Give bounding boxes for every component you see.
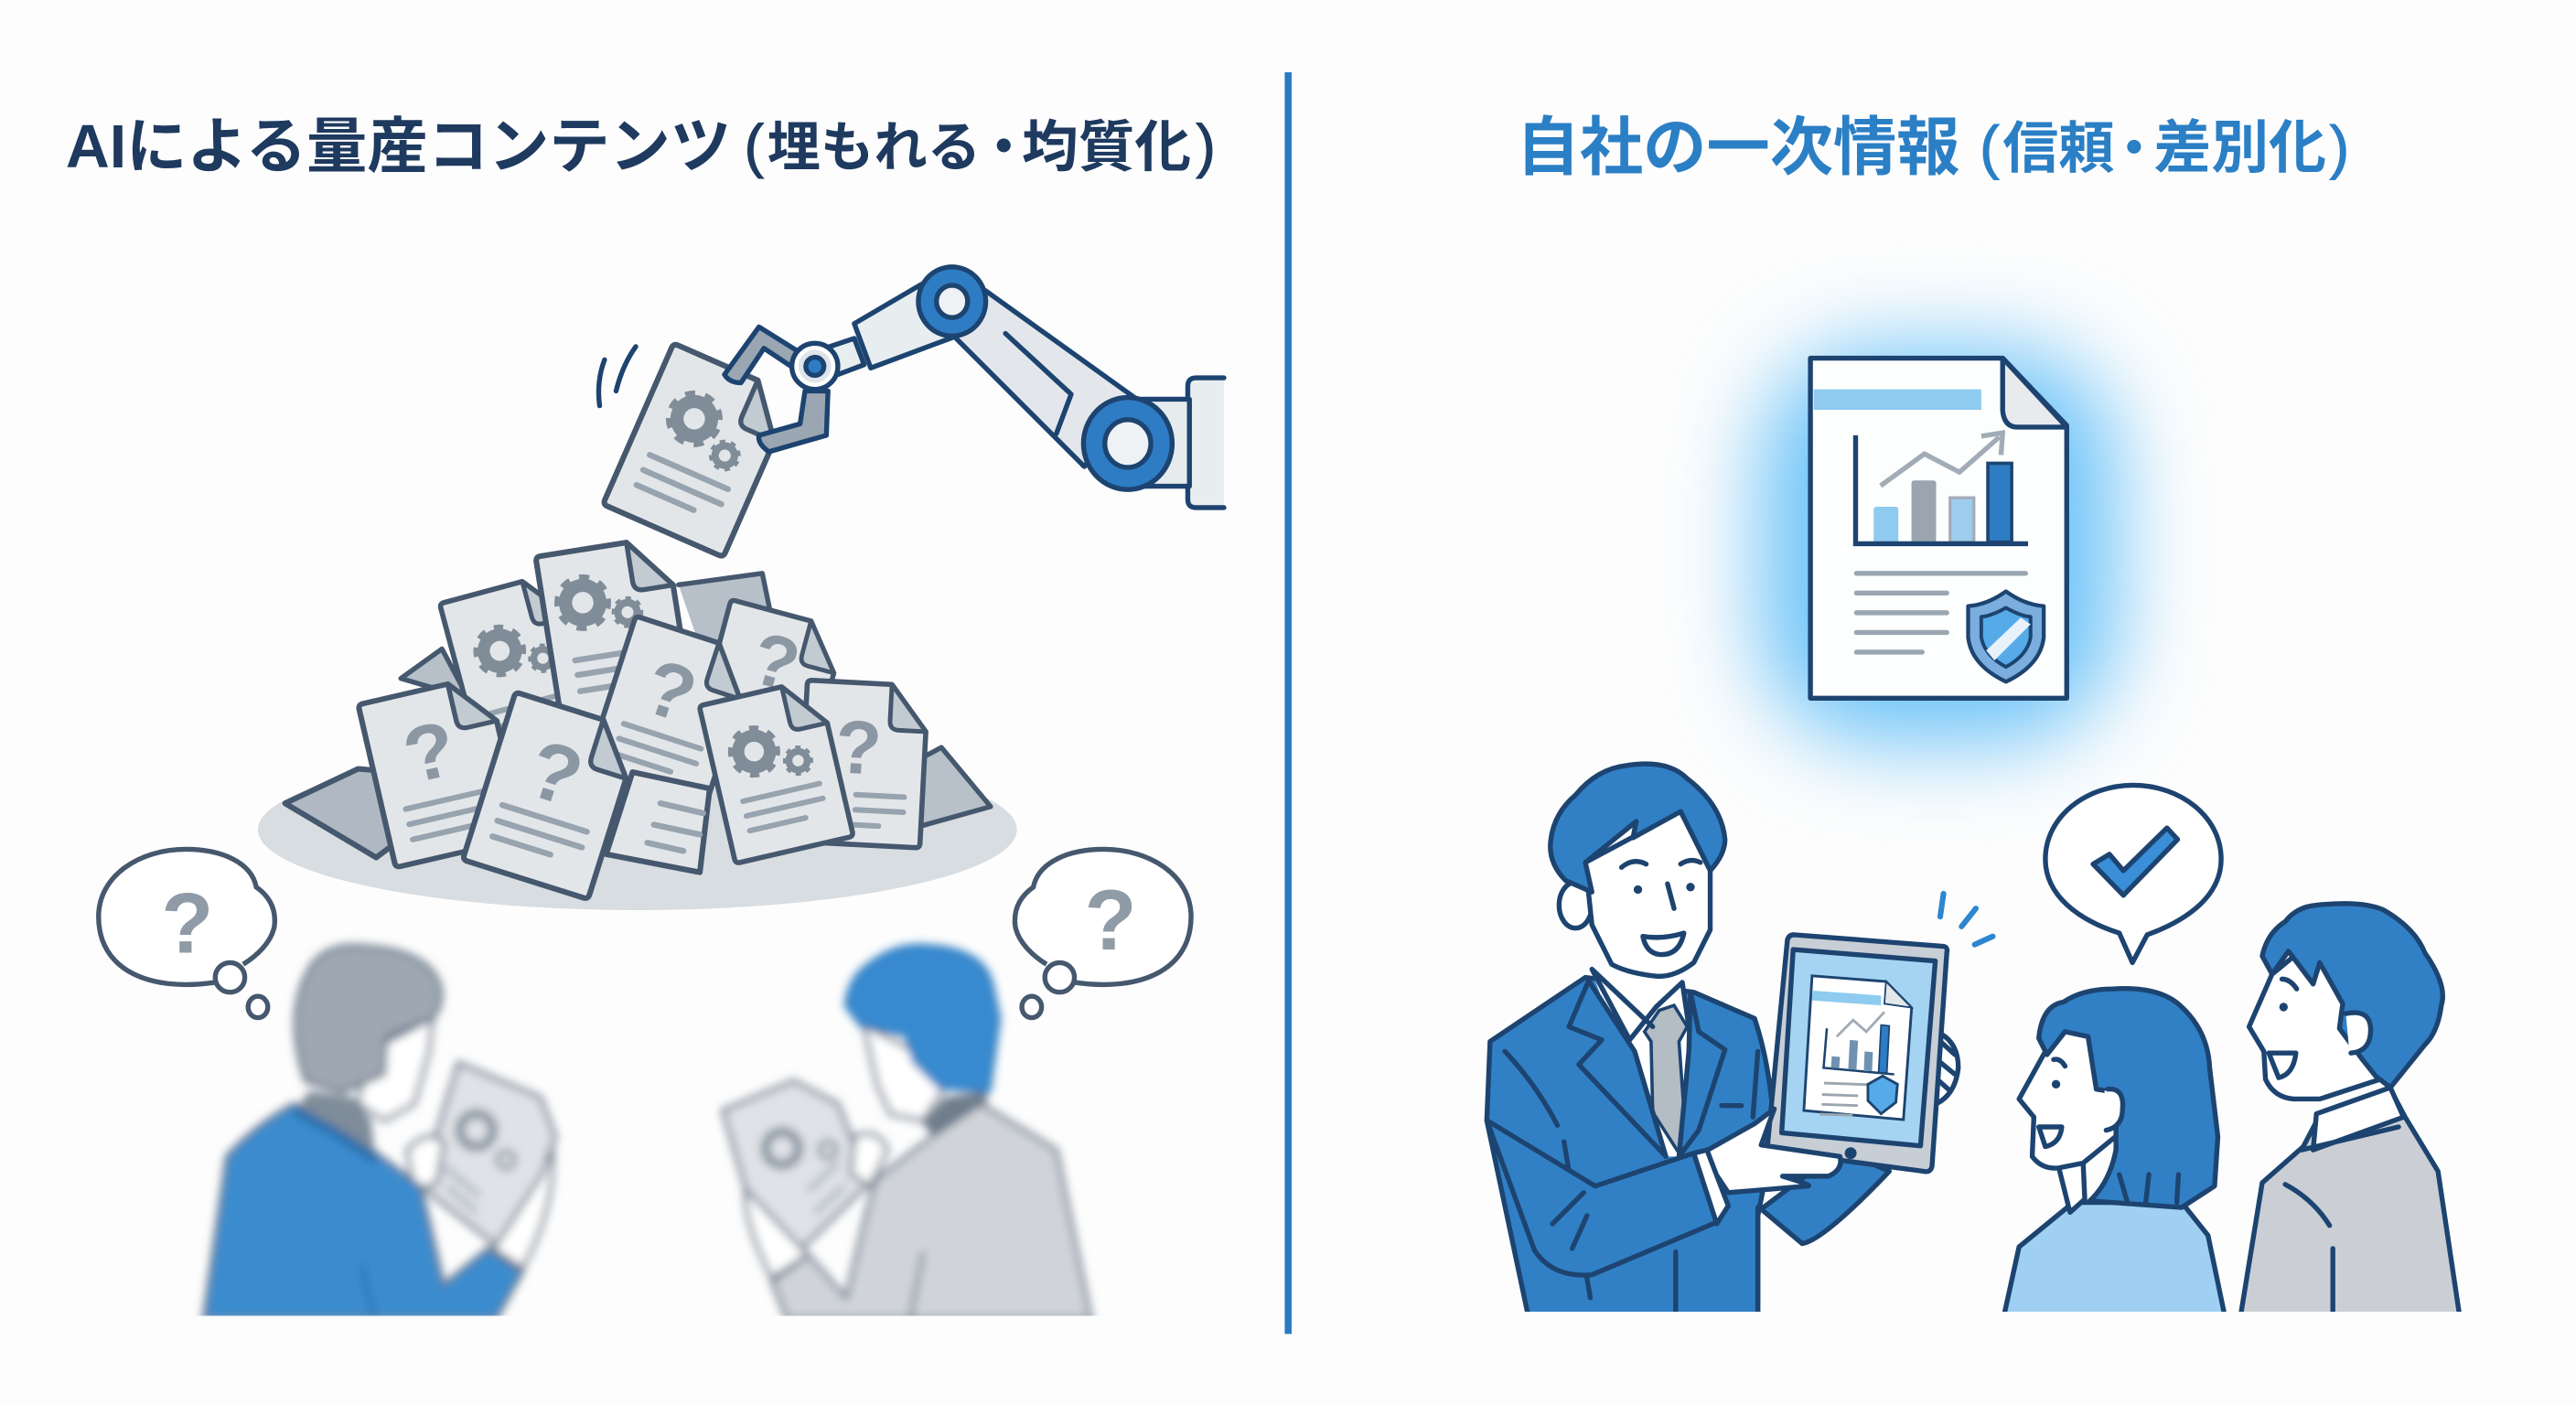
presenter — [1487, 764, 1959, 1314]
panel: first-party information — [1487, 349, 2459, 1314]
header bar — [1814, 390, 1981, 410]
speech bubble with check mark — [2045, 785, 2221, 962]
title: first-party information: ) — [2330, 113, 2349, 180]
title: first-party information: ・ — [2107, 118, 2162, 179]
paper held by gripper — [603, 343, 794, 557]
thought bubble left: ? — [161, 875, 213, 971]
glow behind document — [1761, 349, 2116, 743]
doc: question right — [799, 681, 928, 848]
jacket seams — [1505, 1051, 1758, 1314]
fingers behind tablet — [1938, 1032, 1961, 1105]
thought bubble right: ? — [1085, 872, 1137, 968]
doc: question front left — [359, 675, 524, 867]
robot gripper — [724, 327, 838, 452]
doc: question front left: ? — [395, 704, 464, 800]
title: first-party information — [1517, 112, 2349, 183]
thought bubble right — [1014, 849, 1191, 1018]
primary information document — [1810, 359, 2066, 698]
document pile — [285, 536, 991, 899]
doc: question top right: ? — [743, 617, 808, 708]
sparkle marks — [1940, 894, 1992, 945]
doc: question center back — [585, 616, 755, 813]
panel: AI mass-produced content — [99, 267, 1224, 1319]
hand and cuff — [1702, 1109, 1841, 1193]
ground shadow ellipse — [258, 749, 1017, 910]
doc: gears top — [535, 536, 692, 731]
title: first-party information: 信頼 — [2002, 117, 2114, 179]
motion marks — [598, 347, 636, 406]
lapels — [1569, 981, 1666, 1156]
title: first-party information: 自社の一次情報 — [1517, 112, 1960, 183]
suit body — [1487, 978, 1775, 1314]
head — [1551, 764, 1725, 976]
blurred reader left — [204, 946, 555, 1319]
back arm — [1761, 1150, 1889, 1244]
woman — [2004, 989, 2225, 1314]
doc: question front center: ? — [518, 723, 593, 825]
doc: question right: ? — [833, 703, 884, 791]
tie — [1645, 1005, 1687, 1153]
title: AI mass-produced content: ・ — [977, 116, 1031, 177]
blurred reader right — [723, 946, 1090, 1319]
title: AI mass-produced content: 均質化 — [1022, 115, 1191, 177]
shield icon — [1969, 592, 2044, 681]
doc: question front center — [463, 692, 641, 899]
title: first-party information: ( — [1980, 113, 2000, 180]
shirt — [1592, 972, 1692, 1156]
man right — [2241, 904, 2459, 1314]
doc: lower center — [606, 772, 710, 873]
doc: question top right — [690, 600, 845, 783]
title: AI mass-produced content: 埋もれる — [767, 116, 981, 177]
title: AI mass-produced content: ( — [745, 112, 765, 178]
title: first-party information: 差別化 — [2153, 116, 2326, 180]
front sleeve — [1487, 1121, 1717, 1275]
title: AI mass-produced content — [66, 112, 1216, 181]
doc: gears front right — [699, 679, 853, 863]
bar chart — [1855, 433, 2028, 543]
tablet screen document — [1804, 976, 1912, 1120]
text lines — [1856, 574, 2025, 652]
collar — [1592, 970, 1689, 1040]
center divider — [1284, 72, 1292, 1334]
doc: gears back left — [440, 572, 600, 762]
thought bubble left — [99, 849, 274, 1018]
doc: question center back: ? — [634, 643, 706, 740]
title: AI mass-produced content: ) — [1196, 112, 1216, 178]
robot arm — [830, 267, 1224, 508]
title: AI mass-produced content: AIによる量産コンテンツ — [66, 113, 731, 181]
tablet — [1767, 935, 1948, 1172]
back papers — [285, 574, 991, 857]
